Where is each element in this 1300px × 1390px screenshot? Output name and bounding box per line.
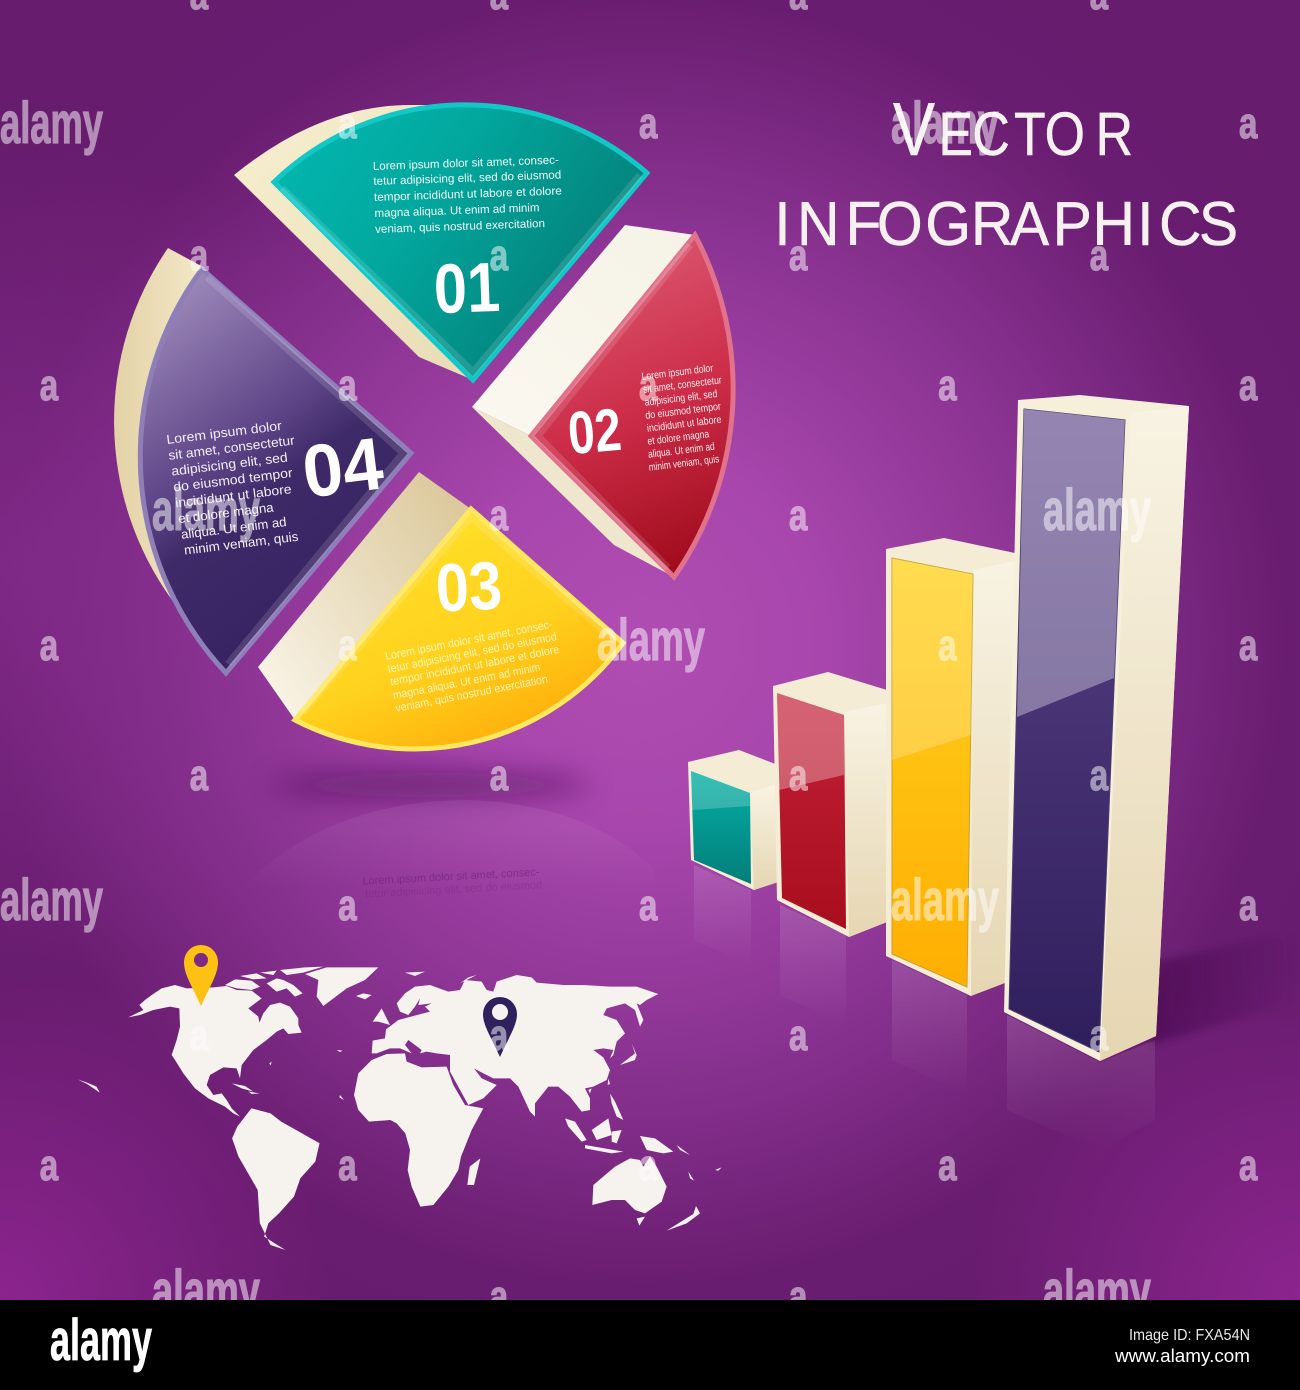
- pie shadow and reflection: Lorem ipsum dolor sit amet, consec-: [362, 866, 540, 888]
- stock watermarks: alamy: [1043, 478, 1151, 543]
- stock watermarks: aa: [490, 492, 808, 540]
- pie shadow and reflection: tetur adipisicing elit, sed do eiusmod: [365, 879, 543, 900]
- website: www.alamy.com: [1114, 1346, 1250, 1366]
- stock watermarks: aaaa: [190, 1012, 1108, 1060]
- segment 01 teal: tetur adipisicing elit, sed do eiusmod: [373, 169, 562, 188]
- segment 03 yellow: magna aliqua. Ut enim ad minim: [392, 662, 541, 702]
- stock watermarks: aaaa: [190, 232, 1108, 280]
- segment 02 red: minim veniam, quis: [648, 453, 720, 474]
- segment 03 yellow: tetur adipisicing elit, sed do eiusmod: [387, 631, 558, 676]
- stock watermarks: aaaa: [190, 752, 1108, 800]
- segment 04 purple: Lorem ipsum dolor: [166, 418, 283, 447]
- stock watermarks: alamy: [891, 91, 999, 156]
- bar 1 teal: [688, 750, 778, 890]
- new zealand: [667, 1206, 700, 1231]
- pie shadow and reflection: [245, 772, 655, 930]
- segment 02 red: aliqua. Ut enim ad: [647, 441, 716, 461]
- segment 02 red: adipisicing elit, sed: [644, 388, 718, 409]
- segment 02 red: do eiusmod tempor: [645, 401, 722, 422]
- segment 02 red: incididunt ut labore: [646, 414, 722, 435]
- footer bar: [0, 1300, 1300, 1390]
- pin: dark purple: [483, 997, 517, 1057]
- segment 01 teal: tempor incididunt ut labore et dolore: [374, 185, 562, 204]
- pin: yellow: [184, 945, 218, 1006]
- segment 04 purple: aliqua. Ut enim ad: [180, 514, 287, 542]
- segment 01 teal: magna aliqua. Ut enim ad minim: [374, 202, 540, 220]
- stock watermarks: aa: [490, 1273, 808, 1321]
- segment 03 yellow: 03: [434, 547, 504, 627]
- stock watermarks: alamy: [891, 868, 999, 933]
- segment 01 teal: veniam, quis nostrud exercitation: [375, 218, 545, 236]
- bar reflections: [694, 865, 1300, 1150]
- title: ECTOR: [938, 100, 1133, 168]
- segment 02 red: Lorem ipsum dolor: [641, 362, 714, 383]
- bar 4 purple: [1004, 395, 1189, 1061]
- stock watermarks: alamy: [0, 868, 103, 933]
- segment 04 purple: [114, 248, 411, 673]
- segment 03 yellow: tempor incididunt ut labore et dolore: [389, 644, 560, 688]
- americas north: [128, 967, 378, 1117]
- stock watermarks: alamy: [0, 91, 103, 156]
- segment 04 purple: 04: [298, 421, 387, 514]
- bar 3 yellow: [886, 538, 1018, 996]
- title: INFOGRAPHICS: [774, 189, 1238, 258]
- footer logo: alamy: [50, 1308, 152, 1373]
- segment 03 yellow: Lorem ipsum dolor sit amet, consec-: [384, 619, 554, 663]
- stock watermarks: alamy: [152, 478, 260, 543]
- australia: [592, 1157, 667, 1213]
- stock watermarks: aaaa: [40, 622, 1258, 670]
- pie chart: [114, 105, 733, 749]
- stock watermarks: alamy: [1043, 1259, 1151, 1324]
- bar chart: [688, 395, 1300, 1150]
- stock watermarks: aaaaa: [40, 362, 1258, 410]
- southeast asia and oceania: [565, 1078, 722, 1231]
- segment 03 yellow: [258, 472, 623, 749]
- stock watermarks: alamy: [152, 1259, 260, 1324]
- segment 04 purple: incididunt ut labore: [174, 481, 292, 510]
- segment 04 purple: et dolore magna: [177, 499, 275, 526]
- segment 02 red: sit amet, consectetur: [642, 374, 723, 396]
- image id: Image ID: FXA54N: [1129, 1327, 1250, 1344]
- title: [774, 87, 1238, 258]
- stock watermarks: aaa: [338, 882, 1258, 930]
- segment 03 yellow: veniam, quis nostrud exercitation: [394, 674, 549, 715]
- segment 04 purple: sit amet, consectetur: [167, 432, 296, 463]
- stock watermarks: alamy: [597, 608, 705, 673]
- segment 02 red: 02: [565, 396, 624, 467]
- stock watermarks: aaaaa: [40, 1142, 1258, 1190]
- title: V: [893, 87, 935, 171]
- segment 04 purple: do eiusmod tempor: [172, 465, 294, 494]
- segment 02 red: et dolore magna: [647, 428, 710, 448]
- segment 01 teal: Lorem ipsum dolor sit amet, consec-: [373, 155, 559, 173]
- south america and pacific: [78, 1079, 320, 1250]
- bar 2 red: [773, 672, 887, 937]
- segment 01 teal: 01: [433, 248, 501, 328]
- stock watermarks: aaa: [338, 100, 1258, 148]
- world map: [78, 967, 722, 1250]
- segment 04 purple: minim veniam, quis: [183, 529, 300, 558]
- segment 02 red: [472, 225, 733, 577]
- segment 04 purple: adipisicing elit, sed: [170, 449, 288, 479]
- segment 01 teal: [234, 105, 647, 380]
- eurasia and africa: [354, 972, 658, 1207]
